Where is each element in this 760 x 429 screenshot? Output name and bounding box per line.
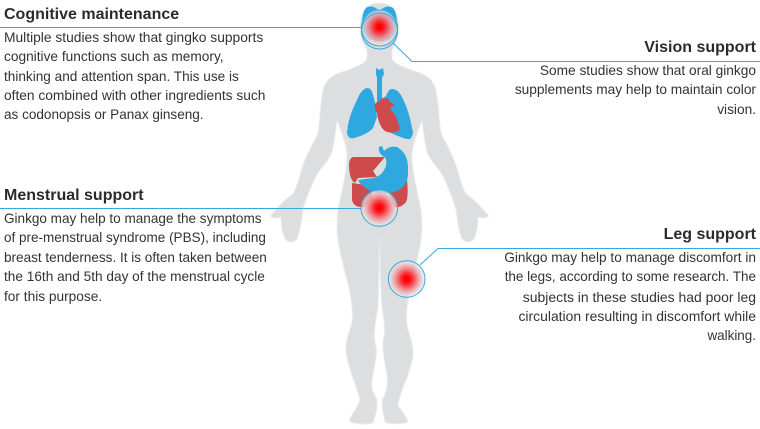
text block: menstrual support: Ginkgo may help to manage the symptoms bbox=[4, 211, 262, 226]
text block: leg support: Ginkgo may help to manage discomfort in bbox=[504, 250, 756, 265]
text block: menstrual support bbox=[4, 187, 267, 304]
pointer: cognitive bbox=[0, 10, 398, 46]
stomach bbox=[358, 146, 408, 193]
text block: leg support: subjects in these studies had poor leg bbox=[523, 289, 756, 305]
text block: menstrual support: breast tenderness. It is often taken between bbox=[4, 250, 267, 265]
text block: leg support: the legs, according to some research. The bbox=[505, 269, 756, 284]
heading: cognitive maintenance: Cognitive maintenance bbox=[4, 6, 179, 23]
pointer: vision bbox=[362, 13, 760, 62]
text block: cognitive maintenance: Multiple studies show that gingko supports bbox=[4, 30, 263, 44]
text block: leg support bbox=[504, 226, 756, 343]
text block: leg support: circulation resulting in discomfort while bbox=[518, 308, 756, 324]
text block: vision support bbox=[515, 39, 756, 117]
heading: menstrual support: Menstrual support bbox=[4, 187, 144, 204]
menstrual red spot bbox=[361, 190, 397, 226]
body silhouette bbox=[270, 3, 489, 424]
text block: leg support: walking. bbox=[707, 328, 756, 343]
text block: cognitive maintenance: often combined with other ingredients such bbox=[4, 88, 265, 103]
pointer: menstrual bbox=[0, 190, 398, 226]
text block: vision support: vision. bbox=[717, 102, 756, 117]
intestines bbox=[352, 180, 408, 207]
heading: leg support: Leg support bbox=[664, 226, 756, 243]
text block: menstrual support: of pre-menstrual syndrome (PBS), including bbox=[4, 230, 266, 245]
head red spot bbox=[362, 9, 398, 45]
text block: cognitive maintenance bbox=[4, 6, 265, 122]
text block: menstrual support: the 16th and 5th day of the menstrual cycle bbox=[4, 269, 265, 284]
brain bbox=[362, 7, 397, 41]
text block: menstrual support: for this purpose. bbox=[4, 289, 102, 304]
text block: vision support: supplements may help to maintain color bbox=[515, 82, 756, 97]
lungs and trachea bbox=[347, 68, 413, 139]
leg red spot bbox=[389, 261, 425, 297]
heading: vision support: Vision support bbox=[644, 39, 756, 56]
text block: cognitive maintenance: cognitive functions such as memory, bbox=[4, 49, 224, 64]
text block: vision support: Some studies show that oral ginkgo bbox=[540, 63, 756, 78]
heart bbox=[375, 98, 400, 132]
pointer: leg bbox=[388, 248, 760, 297]
text block: cognitive maintenance: thinking and attention span. This use is bbox=[4, 69, 239, 84]
liver bbox=[349, 157, 385, 183]
text block: cognitive maintenance: as codonopsis or Panax ginseng. bbox=[4, 107, 204, 122]
